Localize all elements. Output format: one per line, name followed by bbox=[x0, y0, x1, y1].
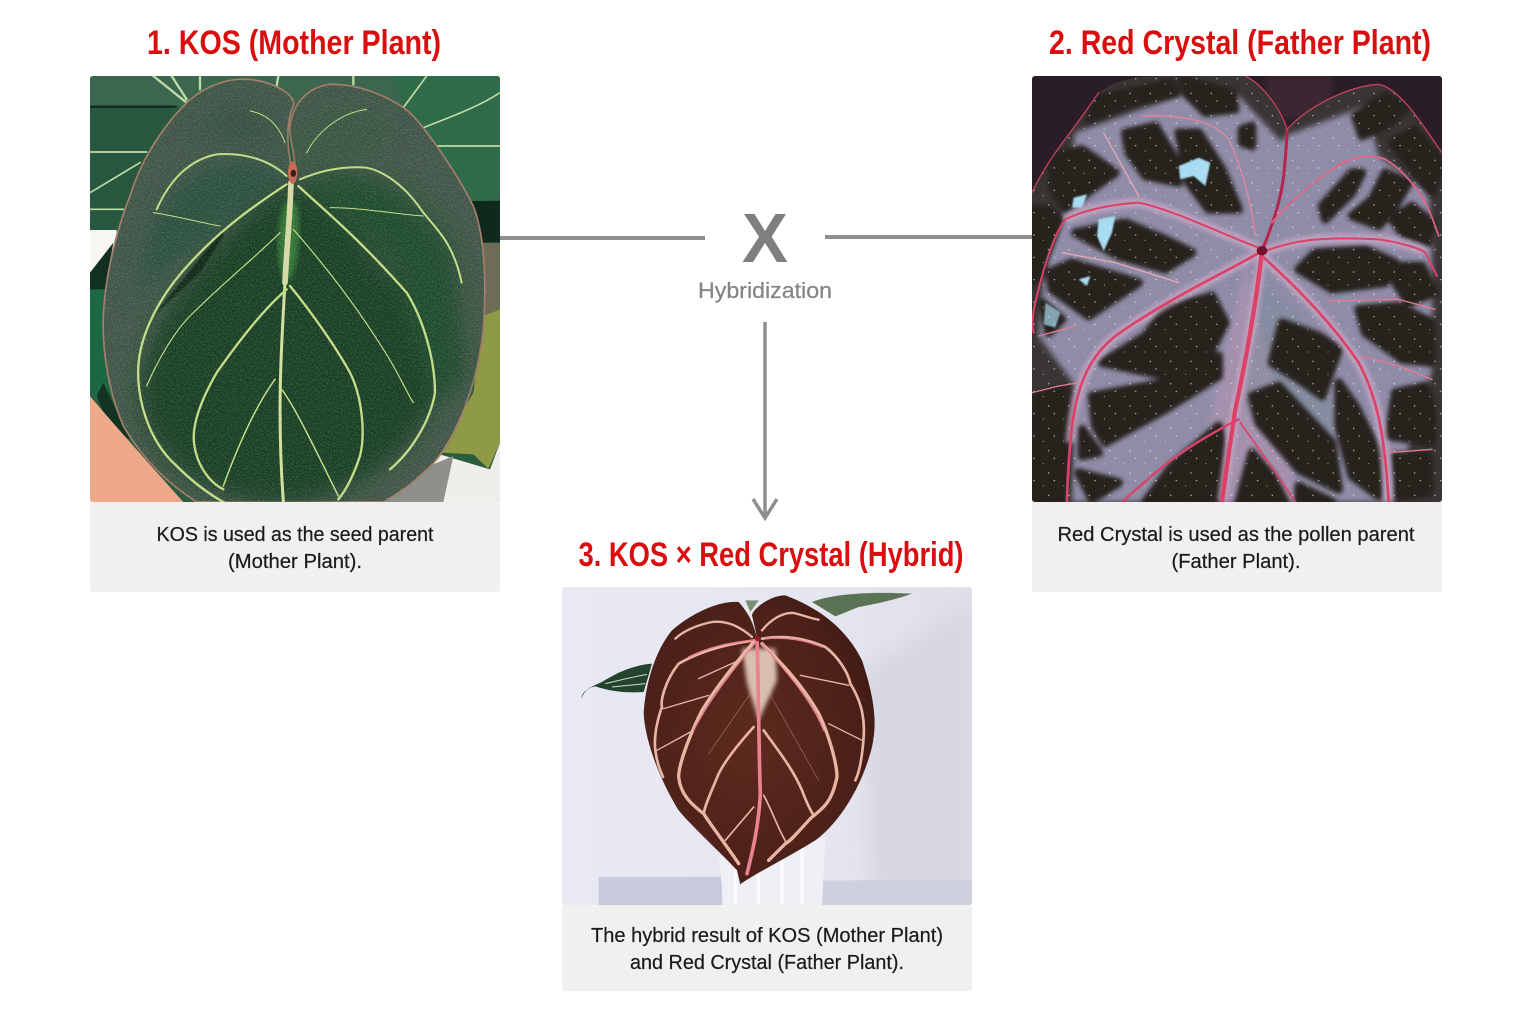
photo: KOS leaf bbox=[90, 76, 500, 502]
caption box: The hybrid result of KOS (Mother Plant) bbox=[591, 925, 943, 947]
icon: cross symbol: X bbox=[742, 199, 788, 277]
water glints bbox=[1044, 158, 1210, 328]
arrow: down to hybrid bbox=[753, 322, 777, 518]
pink midrib bbox=[747, 639, 760, 874]
lilac zone bbox=[1039, 96, 1432, 502]
background objects bbox=[90, 230, 117, 273]
photo: Red Crystal leaf bbox=[1032, 76, 1442, 502]
leaf veins bbox=[138, 109, 462, 502]
caption box: Red Crystal is used as the pollen parent bbox=[1058, 524, 1415, 546]
caption box bbox=[1032, 502, 1442, 592]
panel: Red Crystal father plant bbox=[1032, 76, 1442, 592]
vein halos bbox=[1065, 203, 1425, 502]
caption box: (Mother Plant). bbox=[228, 551, 362, 573]
caption box: KOS is used as the seed parent bbox=[156, 524, 434, 546]
connector: father to cross bbox=[825, 235, 1032, 239]
caption box bbox=[90, 502, 500, 592]
caption box: and Red Crystal (Father Plant). bbox=[630, 952, 904, 974]
leaf blade bbox=[644, 595, 875, 884]
dark islands bbox=[1032, 79, 1442, 502]
caption box: (Father Plant). bbox=[1172, 551, 1300, 573]
vase bbox=[719, 837, 825, 905]
leaf veins bbox=[655, 613, 864, 874]
title: KOS mother plant: 1. KOS (Mother Plant) bbox=[147, 24, 441, 62]
label: hybridization: Hybridization bbox=[698, 278, 832, 303]
title: hybrid: 3. KOS × Red Crystal (Hybrid) bbox=[578, 536, 964, 574]
photo: hybrid leaf bbox=[562, 587, 972, 905]
caption box bbox=[562, 905, 972, 991]
title: Red Crystal father plant: 2. Red Crystal (Father Plant) bbox=[1049, 24, 1431, 62]
back leaves bbox=[812, 593, 912, 616]
connector: mother to cross bbox=[500, 236, 705, 240]
velvet inner tone bbox=[130, 102, 467, 502]
panel: KOS mother plant bbox=[90, 76, 500, 592]
panel: hybrid bbox=[562, 587, 972, 991]
red veins bbox=[1032, 116, 1439, 502]
leaf blade bbox=[103, 79, 485, 502]
